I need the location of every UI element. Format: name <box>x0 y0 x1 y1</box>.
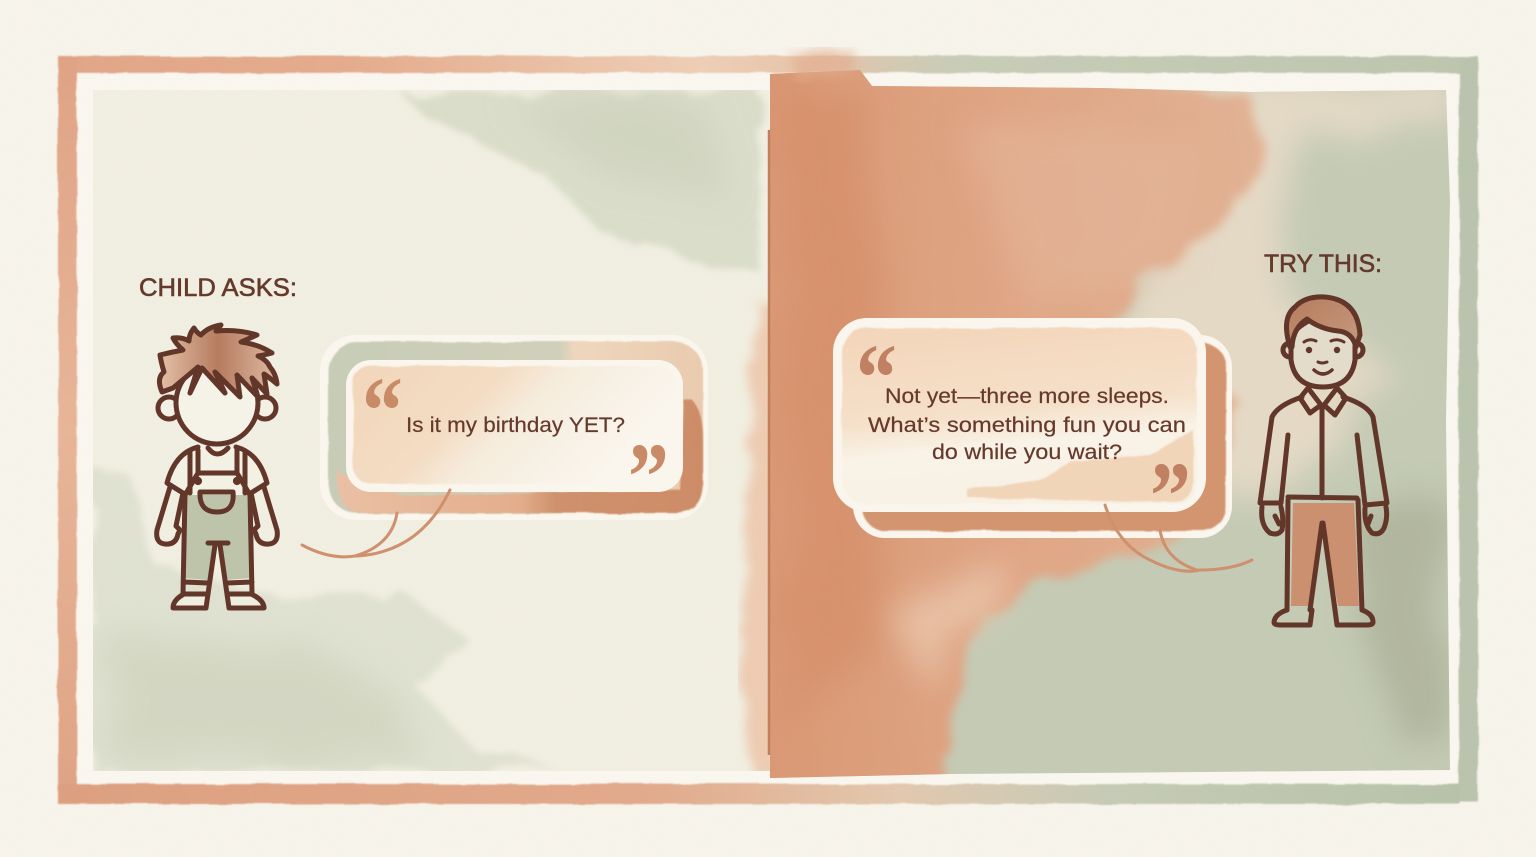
child ears <box>158 397 180 419</box>
wash: pale terracotta <box>973 128 1156 290</box>
callout: child speech bubble <box>320 335 708 531</box>
heading: child asks: CHILD ASKS: <box>139 274 297 302</box>
icon: parent figure <box>1260 297 1387 625</box>
child pocket <box>200 492 233 512</box>
child bib <box>185 450 250 495</box>
wash: peach near fold <box>738 300 770 771</box>
bubble ring lower <box>336 400 703 513</box>
wash: sage bottom left <box>92 470 560 772</box>
wash: deeper sage bottom <box>110 640 420 765</box>
closing quote: ” <box>1150 444 1191 550</box>
heading: try this: TRY THIS: <box>1264 250 1382 278</box>
wash: terracotta <box>750 55 1268 790</box>
parent head <box>1291 318 1355 387</box>
parent hands <box>1262 507 1387 534</box>
parent shirt <box>1260 397 1387 505</box>
arrow: child bubble tail <box>302 490 450 557</box>
parent hair <box>1286 297 1360 347</box>
opening quote: “ <box>856 326 897 432</box>
bubble text: What’s something fun you can <box>868 413 1186 437</box>
bubble text: Not yet—three more sleeps. <box>885 384 1169 408</box>
wash: top spill <box>790 50 860 80</box>
parent face <box>1306 347 1312 353</box>
wash: tan upper right <box>1100 80 1455 500</box>
callout: parent speech bubble <box>833 318 1232 550</box>
parent collar <box>1300 388 1346 415</box>
wash: pale peach low <box>890 560 1010 690</box>
wash: deeper sage top <box>566 90 704 176</box>
wash: darker sage corner <box>1350 490 1445 740</box>
parent shoes <box>1274 610 1373 625</box>
parent trousers <box>1287 500 1362 610</box>
peach lower right wash <box>968 430 1193 502</box>
child shirt fill <box>167 447 267 495</box>
bubble back terracotta <box>862 343 1226 531</box>
panel: left, child side <box>92 90 780 775</box>
bubble back white <box>853 335 1232 538</box>
bubble text: Is it my birthday YET? <box>406 414 625 437</box>
icon: child figure <box>157 325 277 608</box>
child overalls fill <box>184 493 252 580</box>
bubble front fill <box>842 328 1197 504</box>
child arms <box>157 487 277 544</box>
bubble front white <box>833 318 1206 512</box>
child collar <box>208 448 228 454</box>
child legs <box>183 495 252 594</box>
child hair <box>159 325 277 397</box>
parent ears <box>1283 343 1297 357</box>
child sleeves <box>167 447 267 493</box>
parent trousers fill <box>1291 503 1359 606</box>
arrow: parent bubble tail <box>1105 505 1252 571</box>
panel: right, parent side <box>750 50 1460 790</box>
wash: dark terracotta left <box>792 101 882 676</box>
bubble ring <box>328 342 703 513</box>
wash: sage top <box>400 92 760 270</box>
bubble text <box>868 384 1186 464</box>
bubble inner <box>346 360 683 492</box>
fold line <box>768 130 770 755</box>
opening quote: “ <box>362 359 403 465</box>
child head <box>176 362 258 444</box>
closing quote: ” <box>628 425 669 531</box>
child shoes <box>173 594 264 608</box>
bubble text: do while you wait? <box>932 440 1122 464</box>
